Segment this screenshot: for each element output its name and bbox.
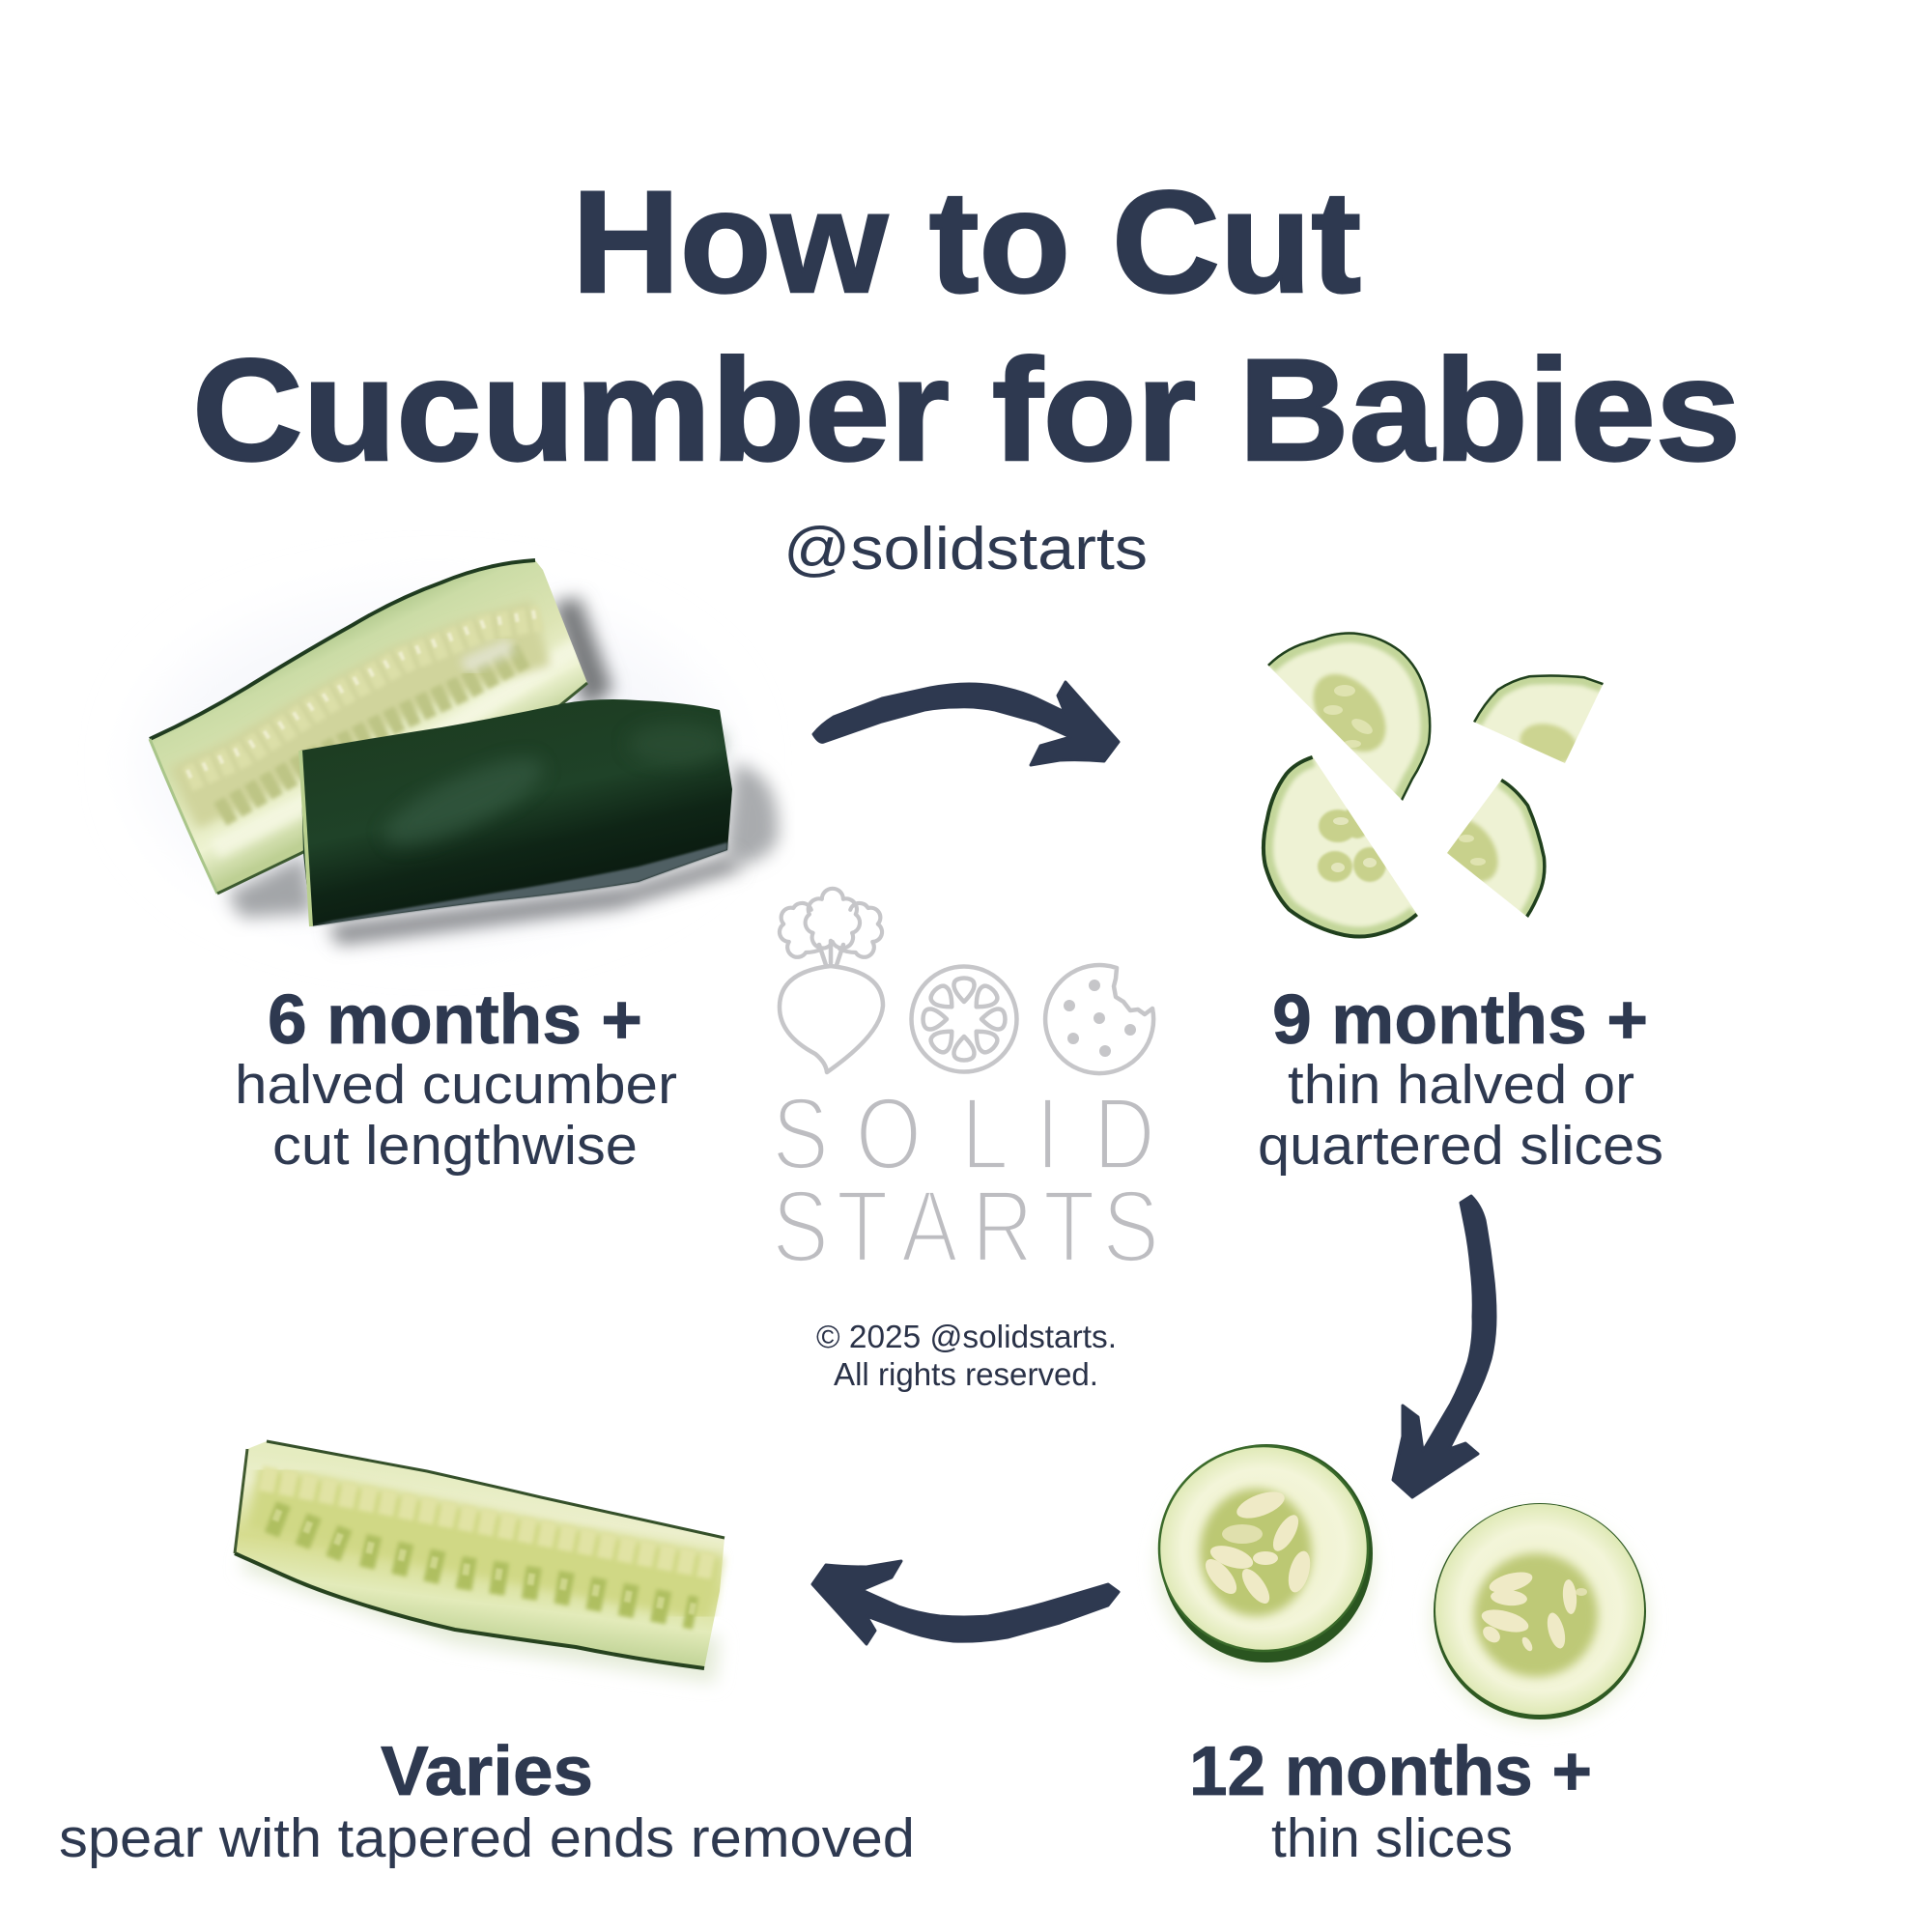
wordmark (772, 1076, 1159, 1284)
arrow: 6 months to 9 months (813, 682, 1119, 765)
arrow: 9 months to 12 months (1393, 1196, 1495, 1497)
quarter slice lower (1447, 779, 1547, 918)
slice one (1159, 1444, 1373, 1662)
slice two (1434, 1503, 1646, 1719)
arrow: 12 months to varies (812, 1561, 1119, 1644)
light halved cucumber (150, 560, 587, 894)
title: How to Cut (572, 160, 1361, 323)
dark cucumber half (300, 699, 732, 926)
icon: cucumber slice (912, 966, 1016, 1072)
wordmark: STARTS (772, 1169, 1159, 1284)
age label: 12 months: thin slices (1271, 1807, 1513, 1869)
panel: thin round slices photo (1157, 1444, 1648, 1725)
copyright (816, 1319, 1117, 1392)
quarter slice right (1473, 674, 1604, 763)
age label: varies: spear with tapered ends removed (59, 1807, 915, 1869)
age label: 9 months: quartered slices (1258, 1115, 1663, 1177)
age label: 6 months (235, 981, 677, 1177)
infographic (60, 189, 1736, 1868)
logo: Solid Starts (772, 889, 1159, 1284)
icon: cookie (1045, 965, 1153, 1073)
age label: 12 months: 12 months + (1189, 1733, 1592, 1810)
age label: varies: Varies (381, 1733, 593, 1810)
panel: spear photo (235, 1441, 724, 1683)
age label: 9 months: 9 months + (1272, 981, 1648, 1059)
wordmark: SOLID (772, 1076, 1155, 1191)
title (192, 160, 1741, 491)
age label: 6 months: halved cucumber (235, 1054, 677, 1116)
copyright: © 2025 @solidstarts. (816, 1319, 1117, 1354)
age label: 6 months: 6 months + (268, 981, 642, 1059)
panel: halved cucumber photo (145, 560, 778, 945)
half slice top (1267, 632, 1432, 801)
age label: 9 months (1258, 981, 1663, 1177)
half slice bottom (1262, 755, 1418, 939)
icon: beet (780, 889, 883, 1072)
age label: 9 months: thin halved or (1288, 1054, 1634, 1116)
age label: 6 months: cut lengthwise (272, 1115, 638, 1177)
handle: @solidstarts (783, 516, 1148, 582)
age label: varies (59, 1733, 915, 1869)
age label: 12 months (1189, 1733, 1592, 1869)
title: Cucumber for Babies (192, 328, 1741, 491)
copyright: All rights reserved. (834, 1356, 1098, 1392)
panel: quartered slices photo (1256, 618, 1608, 947)
